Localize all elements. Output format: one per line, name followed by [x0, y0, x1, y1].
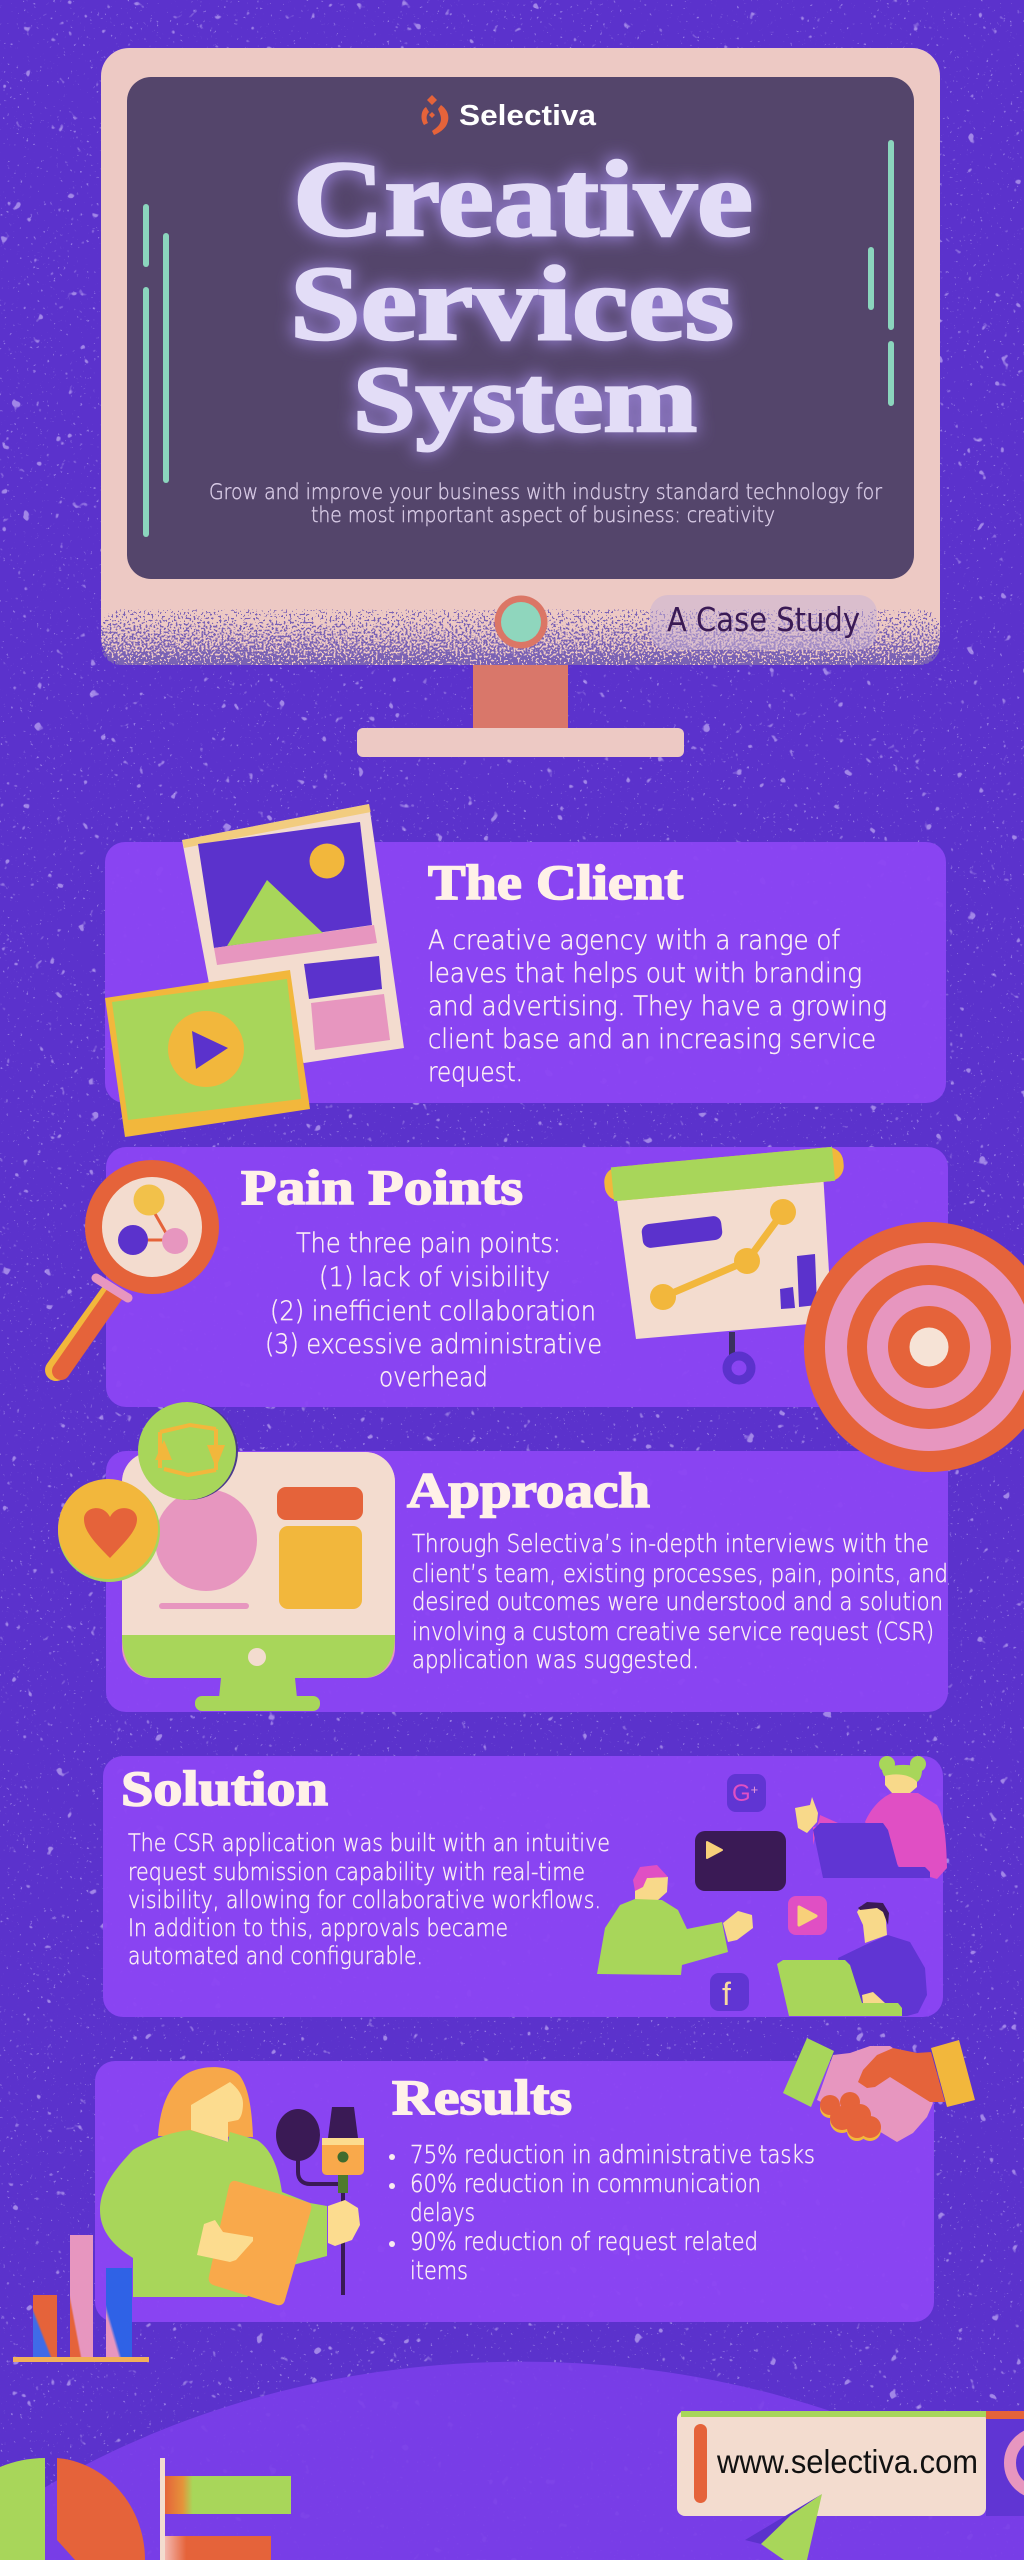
panel: the client: [105, 804, 946, 1137]
icon: magnifier: [56, 1160, 219, 1371]
monitor frame: [101, 48, 940, 665]
approach text: [412, 1529, 948, 1674]
icon: facebook tile: [710, 1973, 749, 2012]
approach text: Through Selectiva’s in-depth interviews with the: [412, 1529, 929, 1558]
website url: www.selectiva.com: [716, 2443, 978, 2480]
illustration: woman with microphone: [100, 2067, 364, 2305]
icon: presentation board: [603, 1146, 845, 1380]
results list: delays: [410, 2198, 475, 2227]
pain points text: [265, 1228, 602, 1393]
approach text: application was suggested.: [412, 1645, 699, 1674]
pain points text: (1) lack of visibility: [319, 1262, 550, 1293]
client text: and advertising. They have a growing: [428, 991, 887, 1022]
icon: refresh badge: [138, 1402, 238, 1500]
accent bar: [694, 2424, 707, 2503]
icon: play tile: [788, 1896, 827, 1935]
monitor screen: [127, 77, 914, 579]
title glow: Creative: [293, 140, 753, 259]
heading: Approach: [407, 1462, 650, 1518]
results list: 60% reduction in communication: [410, 2169, 761, 2198]
solution text: visibility, allowing for collaborative workflows.: [128, 1886, 601, 1914]
monitor stand base: [357, 728, 684, 757]
icon: small bar chart: [13, 2235, 149, 2362]
results list: 90% reduction of request related: [410, 2227, 758, 2256]
icon: pie chart: [0, 2458, 145, 2560]
case study label: [650, 595, 877, 650]
solution text: automated and configurable.: [128, 1942, 423, 1970]
results list: items: [410, 2256, 468, 2285]
icon: google plus tile: +: [751, 1782, 758, 1797]
icon: target: [804, 1222, 1024, 1472]
panel: lighter hill at bottom: [0, 2362, 1024, 2560]
icon: facebook tile: f: [722, 1976, 731, 2012]
heading: Pain Points: [241, 1159, 523, 1215]
screen accent lines: [143, 140, 894, 537]
icon: google plus tile: [727, 1774, 766, 1812]
pain points text: (3) excessive administrative: [265, 1329, 602, 1360]
title: [290, 140, 753, 452]
title glow: Services: [290, 245, 734, 362]
solution text: In addition to this, approvals became: [128, 1914, 508, 1942]
client text: A creative agency with a range of: [428, 925, 840, 956]
icon: horizontal bar chart: [160, 2458, 291, 2560]
heading: The Client: [428, 854, 683, 910]
icon: image card: [182, 804, 404, 1063]
logo wordmark: Selectiva: [459, 100, 597, 132]
icon: cursor arrow: [745, 2494, 822, 2560]
monitor stand neck: [473, 660, 568, 730]
solution text: request submission capability with real-time: [128, 1858, 585, 1886]
icon: handshake: [783, 2038, 975, 2142]
client text: leaves that helps out with branding: [428, 958, 862, 989]
heading: Results: [392, 2069, 572, 2125]
illustration: person with thumbs up: [795, 1756, 947, 1879]
client text: client base and an increasing service: [428, 1024, 876, 1055]
subtitle: Grow and improve your business with industry standard technology for: [209, 480, 882, 504]
pain points text: The three pain points:: [296, 1228, 561, 1259]
solution text: [128, 1829, 610, 1970]
panel: pain points: [56, 1146, 948, 1407]
logo icon: [422, 95, 448, 135]
panel: approach: [58, 1402, 948, 1712]
icon: desktop monitor: [122, 1452, 395, 1711]
pain points text: (2) inefficient collaboration: [270, 1296, 596, 1327]
panel: solution: [103, 1756, 947, 2017]
power button: [494, 596, 548, 648]
heading: Solution: [121, 1760, 328, 1816]
subtitle: [209, 480, 882, 527]
subtitle: the most important aspect of business: creativity: [311, 503, 775, 527]
illustration: person presenting: [597, 1865, 753, 1975]
title: System: [353, 348, 697, 452]
speckled frame bottom: [101, 609, 940, 665]
illustration: person on laptop: [777, 1902, 927, 2016]
icon: google plus tile: G: [732, 1780, 751, 1807]
approach text: desired outcomes were understood and a solution: [412, 1587, 943, 1616]
title: Creative: [293, 140, 753, 259]
icon: video card: [105, 970, 310, 1137]
client text: request.: [428, 1057, 523, 1088]
client text: [428, 925, 887, 1088]
results list: [389, 2140, 815, 2285]
icon: video tile: [695, 1831, 786, 1891]
website card: [677, 2411, 1024, 2516]
results list: 75% reduction in administrative tasks: [410, 2140, 815, 2169]
panel: results: [95, 2038, 975, 2322]
monitor hero: [101, 48, 940, 757]
solution text: The CSR application was built with an intuitive: [128, 1829, 610, 1857]
title glow: [290, 140, 753, 452]
pain points text: overhead: [379, 1362, 488, 1393]
card side panel: [986, 2411, 1024, 2516]
icon: heart badge: [58, 1479, 160, 1582]
case study label: A Case Study: [667, 600, 860, 639]
logo: [422, 95, 597, 135]
title: Services: [290, 245, 734, 362]
title glow: System: [353, 348, 697, 452]
approach text: involving a custom creative service request (CSR): [412, 1617, 934, 1646]
